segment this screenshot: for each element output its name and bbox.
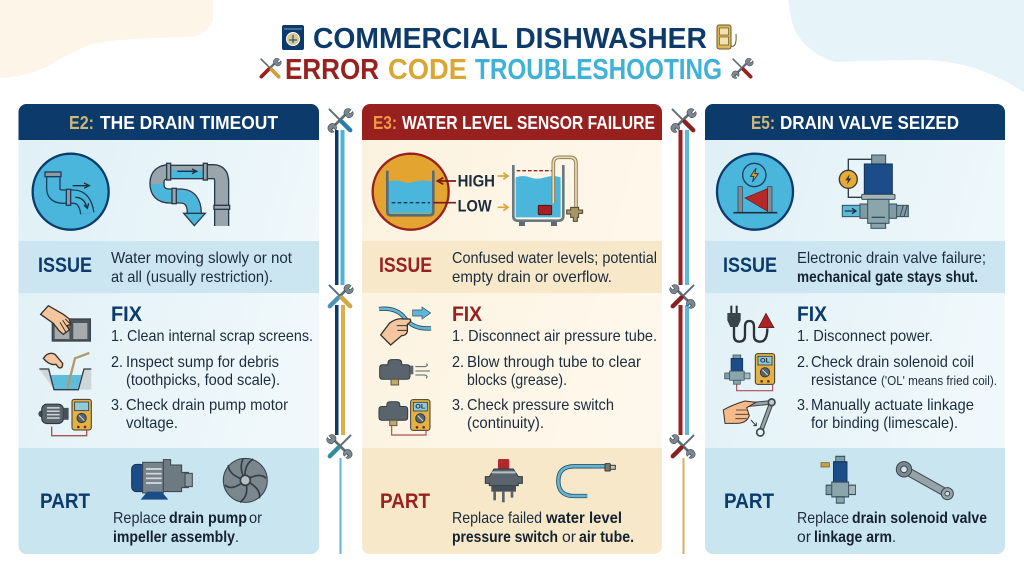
part band: [18, 448, 319, 554]
panel background: [362, 140, 662, 554]
icon: divider tools bottom: [670, 435, 695, 458]
fix heading: FIX: [797, 303, 827, 326]
part text: impeller assembly: [113, 529, 235, 546]
part text: [452, 510, 634, 546]
part label: PART: [380, 490, 430, 513]
header: [362, 104, 662, 140]
fix steps: ('OL' means fried coil).: [881, 373, 997, 388]
fix steps: (toothpicks, food scale).: [126, 372, 280, 389]
part text: linkage arm: [814, 529, 892, 546]
header: THE DRAIN TIMEOUT: [100, 112, 279, 133]
part text: Replace failed: [452, 510, 542, 527]
icon: drain pump: [132, 460, 192, 500]
fix heading: FIX: [452, 303, 482, 326]
header: [705, 104, 1005, 140]
title word: CODE: CODE: [388, 54, 467, 86]
icon: multimeter: [717, 25, 736, 49]
part text: Replace: [797, 510, 849, 527]
icon: switch and multimeter: OL: [415, 403, 425, 410]
divider left: [327, 109, 353, 554]
icon: tools left: [261, 58, 281, 77]
part text: .: [235, 529, 239, 546]
fix steps: [111, 328, 313, 432]
issue text: Water moving slowly or not: [111, 250, 293, 267]
icon: inspecting sump: [39, 353, 91, 390]
icon: motor and multimeter: [38, 399, 91, 436]
part text: water level: [545, 510, 622, 527]
icon: solenoid and multimeter: OL: [760, 358, 770, 365]
part text: drain pump: [169, 510, 247, 527]
icon: pipe with slow water: [157, 163, 230, 226]
issue text: [452, 250, 657, 286]
background blob: blue top right: [788, 0, 1024, 92]
part text: [797, 510, 987, 546]
part text: Replace: [113, 510, 166, 527]
icon: unplug power: [727, 306, 774, 342]
fix steps: Check pressure switch: [467, 397, 614, 414]
part text: air tube.: [579, 529, 634, 546]
issue text: mechanical gate stays shut.: [797, 269, 978, 286]
panel background: [18, 140, 319, 554]
icon: air tube part: [558, 464, 615, 496]
issue text: [797, 250, 986, 286]
icon: tank with pressure tube: [513, 157, 583, 226]
icon: tank level badge: [373, 154, 456, 230]
fix steps: 3.: [797, 397, 809, 414]
fix heading: FIX: [111, 303, 142, 326]
issue text: Electronic drain valve failure;: [797, 250, 986, 267]
fix steps: 3.: [111, 397, 123, 414]
icon: seized gate badge: [717, 154, 793, 230]
issue band: [705, 241, 1005, 293]
fix steps: resistance: [811, 372, 877, 389]
issue text: [111, 250, 293, 286]
icon: linkage arm part: [896, 462, 953, 500]
part text: [113, 510, 263, 546]
fix steps: Check drain pump motor: [126, 397, 289, 414]
header: WATER LEVEL SENSOR FAILURE: [402, 112, 655, 133]
icon: impeller: [223, 458, 267, 502]
icon: divider tools bottom: [327, 435, 352, 458]
part text: or: [562, 529, 577, 546]
icon: divider tools top: [328, 109, 353, 132]
title line 1: COMMERCIAL DISHWASHER: [313, 23, 707, 55]
fix steps: Manually actuate linkage: [811, 397, 974, 414]
icon: tools right: [732, 58, 753, 78]
fix steps: voltage.: [126, 415, 178, 432]
part text: or: [797, 529, 812, 546]
fix steps: Blow through tube to clear: [467, 354, 642, 371]
fix steps: 2.: [797, 354, 809, 371]
fix steps: for binding (limescale).: [811, 415, 958, 432]
icon: hand pushing linkage: [723, 399, 775, 436]
fix steps: [452, 328, 657, 432]
part text: or: [249, 510, 263, 527]
part text: pressure switch: [452, 529, 558, 546]
fix steps: 1. Disconnect air pressure tube.: [452, 328, 657, 345]
issue label: ISSUE: [379, 254, 432, 277]
fix steps: (continuity).: [467, 415, 544, 432]
part label: PART: [724, 490, 774, 513]
icon: divider tools top: [671, 109, 696, 132]
icon: switch and multimeter: [379, 400, 430, 435]
issue band: [362, 241, 662, 293]
header: DRAIN VALVE SEIZED: [780, 112, 959, 133]
title word: ERROR: ERROR: [285, 54, 379, 86]
fix steps: blocks (grease).: [467, 372, 567, 389]
label: high and low: LOW: [458, 198, 492, 216]
issue text: at all (usually restriction).: [111, 269, 273, 286]
icon: solenoid drain valve: [839, 155, 908, 228]
fix steps: 1. Clean internal scrap screens.: [111, 328, 313, 345]
header: E2:: [69, 112, 94, 133]
fix steps: 2.: [452, 354, 464, 371]
part text: drain solenoid valve: [852, 510, 987, 527]
fix steps: 3.: [452, 397, 464, 414]
panel: E2 the drain timeout: [18, 104, 319, 554]
label: high and low: [458, 173, 508, 216]
fix steps: Check drain solenoid coil: [811, 354, 974, 371]
background blob: cream top left: [0, 0, 213, 78]
fix steps: 1. Disconnect power.: [797, 328, 933, 345]
icon: divider tools middle: [329, 285, 353, 306]
fix steps: Inspect sump for debris: [126, 354, 279, 371]
header: [18, 104, 319, 140]
header: E5:: [751, 112, 775, 133]
panel: E3 water level sensor failure: [362, 104, 662, 554]
icon: solenoid valve part: [821, 456, 856, 503]
label: high and low: HIGH: [458, 173, 495, 191]
icon: pressure switch part: [485, 459, 522, 502]
icon: hand with air tube: [379, 307, 431, 345]
icon: solenoid and multimeter: [725, 354, 775, 391]
icon: hand cleaning screen: [41, 306, 90, 341]
issue label: ISSUE: [38, 254, 92, 277]
header: E3:: [373, 112, 397, 133]
part text: .: [892, 529, 896, 546]
fix steps: 2.: [111, 354, 123, 371]
part band: [362, 448, 662, 554]
icon: pressure switch blowing: [380, 360, 430, 385]
panel: E5 drain valve seized: [705, 104, 1005, 554]
issue text: empty drain or overflow.: [452, 269, 612, 286]
icon: dishwasher: [282, 25, 304, 50]
fix steps: [797, 328, 997, 432]
title word: TROUBLESHOOTING: TROUBLESHOOTING: [475, 54, 722, 86]
panel background: [705, 140, 1005, 554]
title: [261, 23, 753, 86]
icon: divider tools middle: [670, 285, 695, 308]
issue band: [18, 241, 319, 293]
part label: PART: [40, 490, 90, 513]
part band: [705, 448, 1005, 554]
divider right: [670, 109, 696, 554]
issue text: Confused water levels; potential: [452, 250, 657, 267]
icon: clogged pipe badge: [33, 154, 109, 230]
issue label: ISSUE: [723, 254, 777, 277]
